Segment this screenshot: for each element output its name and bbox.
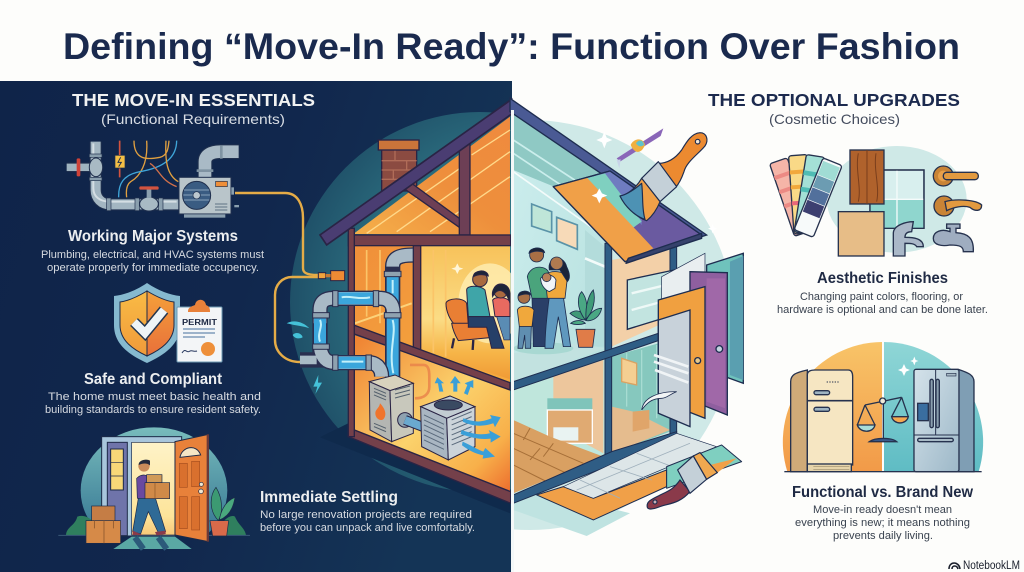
connector into wall: [318, 271, 345, 281]
interior walls: [513, 113, 670, 493]
icon: furnace: [369, 375, 424, 442]
pale teal circle behind house: [514, 120, 724, 530]
text block: immediate settling: No large renovation projects are required: [260, 509, 472, 521]
framed pictures: [532, 204, 577, 249]
text block: aesthetic finishes: Changing paint colors, flooring, or: [800, 291, 963, 303]
icon: outdoor AC unit: [421, 396, 475, 460]
upgrades heading: [708, 90, 960, 127]
icon: paint swatches, materials and hardware: [770, 146, 982, 256]
text block: functional vs brand new: Functional vs. Brand New: [792, 484, 974, 501]
framing beams: [513, 243, 677, 503]
text block: safe and compliant: [45, 371, 261, 416]
text block: working major systems: [41, 228, 264, 274]
icon: large paint brush: [617, 128, 707, 221]
text block: working major systems: operate properly for immediate occupency.: [47, 262, 259, 274]
text block: safe and compliant: The home must meet basic health and: [48, 391, 261, 403]
icon: person carrying box through open door: [58, 427, 250, 554]
panel: optional upgrades (light half): [509, 94, 1020, 572]
text block: functional vs brand new: Move-in ready doesn't mean: [813, 504, 952, 516]
icon: permit clipboard: [177, 300, 222, 362]
essentials heading: THE MOVE-IN ESSENTIALS: [72, 90, 315, 110]
text block: immediate settling: Immediate Settling: [260, 489, 398, 506]
icon: door and finish samples: [642, 253, 743, 427]
center divider: [511, 110, 514, 572]
text block: functional vs brand new: [792, 484, 974, 542]
roof band: [510, 98, 707, 238]
icon: permit clipboard: PERMIT: [182, 317, 218, 327]
text block: safe and compliant: Safe and Compliant: [84, 371, 222, 388]
upgrades heading: (Cosmetic Choices): [769, 111, 900, 127]
people: family in living room: [513, 248, 573, 354]
illustration: cutaway house, functional side: [287, 99, 522, 513]
panel: move-in essentials (dark half): [0, 81, 512, 572]
text block: immediate settling: [260, 489, 475, 534]
essentials heading: [72, 90, 315, 127]
family on armchair: [446, 271, 510, 350]
text block: aesthetic finishes: [777, 270, 988, 316]
text block: working major systems: Working Major Systems: [68, 228, 238, 245]
icon: small paint brush: [647, 453, 717, 509]
text block: working major systems: Plumbing, electrical, and HVAC systems must: [41, 249, 264, 261]
structural beams: [348, 228, 511, 503]
upper room: [354, 246, 522, 385]
text block: functional vs brand new: everything is new; it means nothing: [795, 517, 970, 529]
essentials heading: (Functional Requirements): [101, 111, 285, 127]
upgrades heading: THE OPTIONAL UPGRADES: [708, 90, 960, 110]
text block: aesthetic finishes: Aesthetic Finishes: [817, 270, 948, 287]
roof: [320, 99, 512, 245]
window: [627, 267, 690, 329]
arrow: yellow wire connecting systems to house: [235, 193, 318, 362]
paint swatch panel on roof: [553, 171, 702, 263]
chimney: [378, 140, 419, 191]
title: Defining “Move-In Ready”: Function Over Fashion: [63, 26, 960, 67]
lower room: [354, 335, 510, 495]
icon: water splash and spark: [287, 321, 322, 394]
icon: potted plant: [570, 290, 602, 347]
arrows: airflow: [435, 376, 501, 459]
icon: safety shield with check: [114, 283, 180, 363]
attic with rafters: [353, 117, 510, 235]
sparkles: [596, 132, 717, 233]
teal glow circle behind house: [290, 112, 511, 490]
text block: immediate settling: before you can unpack and live comfortably.: [260, 522, 475, 534]
text block: functional vs brand new: prevents daily living.: [833, 530, 933, 542]
text block: safe and compliant: building standards to ensure resident safety.: [45, 404, 261, 416]
icon: pipes, wires and HVAC unit: [67, 141, 239, 218]
illustration: cutaway house, cosmetic side: [510, 98, 743, 536]
text block: aesthetic finishes: hardware is optional and can be done later.: [777, 304, 988, 316]
icon: old fridge vs new fridge with scales: [783, 342, 983, 472]
pipe loop with flowing water: [300, 255, 413, 380]
floor samples: [537, 433, 742, 520]
